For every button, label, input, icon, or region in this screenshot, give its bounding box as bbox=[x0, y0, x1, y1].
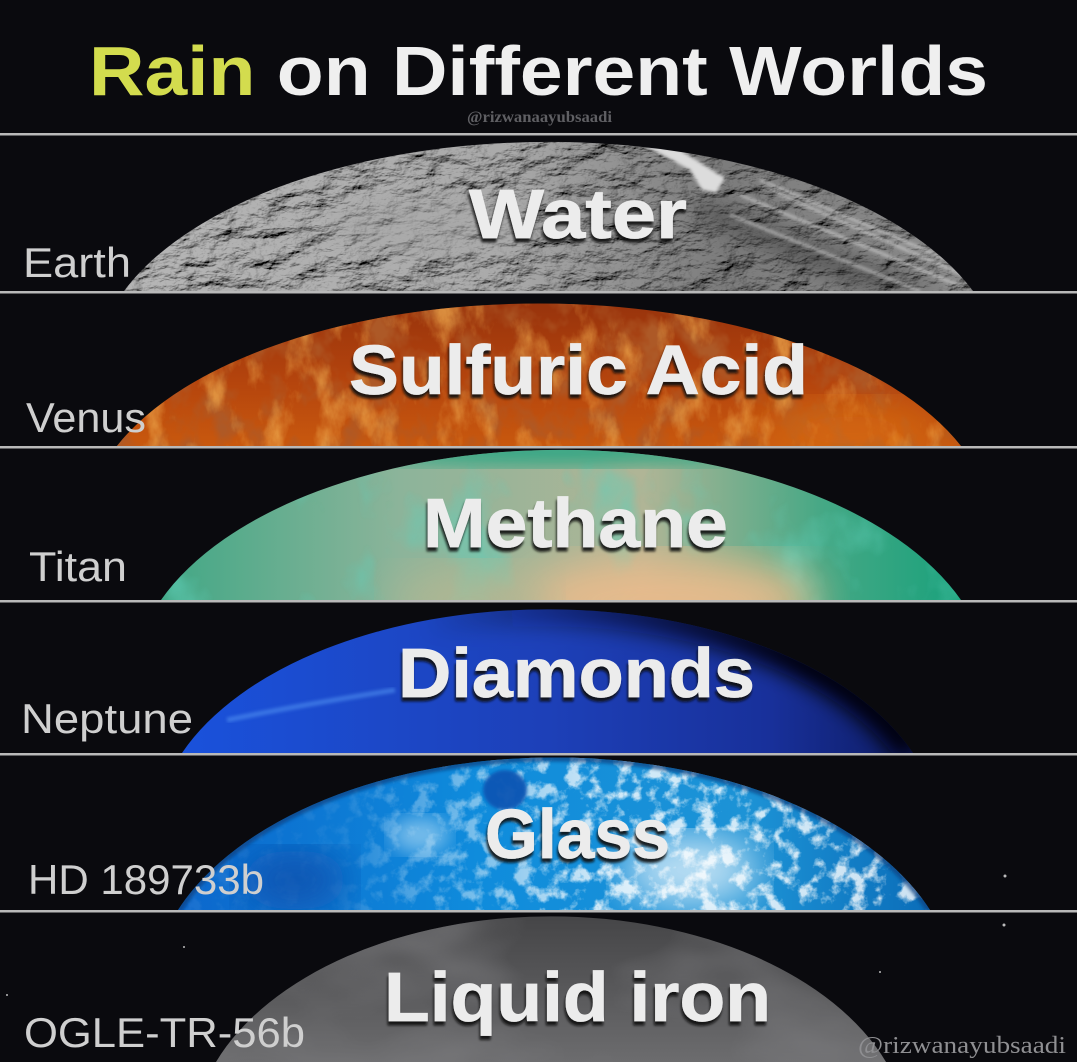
rain type: Diamonds: Diamonds bbox=[398, 634, 755, 712]
rain type: Sulfuric Acid: Sulfuric Acid bbox=[349, 331, 808, 409]
watermark: bottom: @rizwanayubsaadi bbox=[858, 1033, 1066, 1059]
label: Titan: Titan bbox=[29, 543, 127, 590]
stars bbox=[6, 874, 1006, 996]
planet: HD 189733b bbox=[175, 756, 935, 911]
label: HD 189733b: HD 189733b bbox=[28, 856, 264, 903]
label: Venus: Venus bbox=[26, 394, 146, 441]
rain type: Water: Water bbox=[469, 175, 687, 253]
title: Rain on Different Worlds bbox=[89, 32, 988, 110]
planet: OGLE-TR-56b bbox=[210, 915, 890, 1062]
label: Earth: Earth bbox=[23, 239, 131, 286]
rain type: Glass: Glass bbox=[485, 795, 670, 873]
planet: Neptune bbox=[175, 604, 920, 754]
label: Neptune: Neptune bbox=[21, 695, 193, 742]
rain type: Liquid iron: Liquid iron bbox=[384, 958, 771, 1036]
row dividers bbox=[0, 133, 1077, 912]
label: OGLE-TR-56b: OGLE-TR-56b bbox=[24, 1009, 305, 1056]
watermark: top: @rizwanaayubsaadi bbox=[467, 109, 613, 126]
planet: Earth bbox=[120, 135, 980, 292]
rain type: Methane: Methane bbox=[423, 484, 728, 562]
planet: Titan bbox=[161, 450, 961, 600]
planet: Venus bbox=[117, 304, 961, 446]
